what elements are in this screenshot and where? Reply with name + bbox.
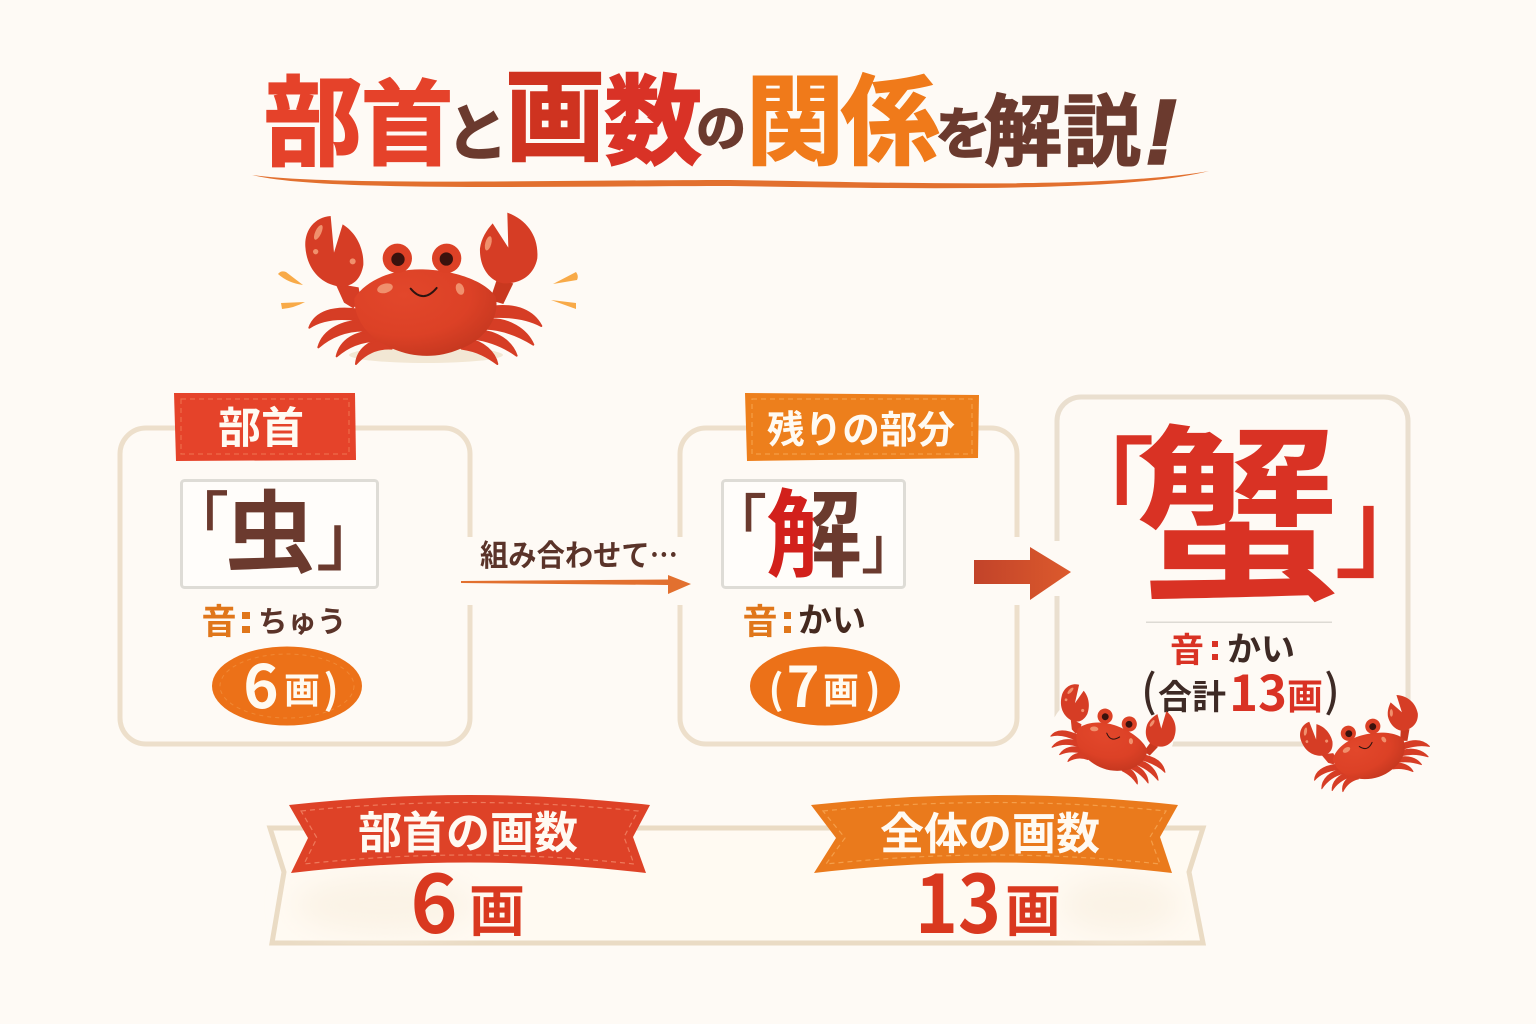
badge: 7 strokes: )	[865, 658, 881, 716]
badge: 7 strokes: 7	[786, 643, 820, 724]
value: 6 strokes: 画	[469, 867, 525, 948]
total strokes: )	[1324, 656, 1340, 720]
kanji box: mushi: 」	[316, 484, 386, 585]
halo: left small crab	[1050, 688, 1174, 782]
value: 6 strokes: 6	[410, 841, 458, 957]
badge: 6 strokes	[212, 639, 362, 726]
title: 数	[604, 43, 702, 185]
kanji box: kai: 「	[707, 475, 767, 562]
ribbon: total strokes: 全体の画数	[880, 798, 1100, 862]
badge: 7 strokes: 画	[823, 662, 859, 714]
badge: 6 strokes: 画	[284, 662, 320, 714]
large kanji: kani: 」	[1334, 439, 1446, 601]
ribbon: radical strokes: 部首の画数	[358, 797, 578, 861]
halo: right small crab	[1304, 692, 1428, 792]
title: 係	[841, 43, 939, 185]
large kanji: kani: 「	[1047, 403, 1155, 559]
reading: chuu: 音	[201, 594, 237, 645]
total strokes	[1141, 655, 1340, 726]
title: の	[696, 89, 746, 161]
panel: crab kanji result	[1047, 367, 1446, 792]
total strokes: (	[1141, 656, 1157, 720]
title: 画	[505, 36, 605, 181]
total strokes: 13	[1229, 655, 1287, 726]
value: 13 strokes	[915, 841, 1061, 957]
panel: radical	[120, 393, 477, 744]
badge: 6 strokes: 6	[243, 639, 279, 726]
tag: radical: 部首	[218, 394, 304, 456]
reading: kai total	[1170, 622, 1295, 672]
title underline	[252, 171, 1209, 188]
title: と	[446, 83, 508, 173]
title: !	[1146, 83, 1176, 183]
ribbon: total strokes	[811, 795, 1178, 873]
tag: remaining part	[745, 393, 979, 461]
arrow: combine	[461, 531, 691, 594]
value: 6 strokes	[410, 841, 525, 957]
kanji box: kai: 解	[766, 458, 862, 597]
reading: kai	[742, 593, 866, 645]
badge: 7 strokes: (	[768, 658, 784, 716]
title: 首	[361, 51, 453, 184]
icon: small crab right	[1296, 690, 1435, 799]
arrow: combine: 組み合わせて…	[480, 531, 678, 575]
title	[264, 36, 1176, 186]
total strokes: 画	[1287, 668, 1323, 720]
value: 13 strokes: 画	[1005, 867, 1061, 948]
ribbon: radical strokes	[289, 795, 650, 873]
kanji box: mushi: 「	[167, 471, 229, 561]
arrow: result	[974, 547, 1071, 600]
title: を	[935, 90, 991, 171]
title: 部	[264, 44, 362, 186]
panel: remaining part	[673, 393, 1024, 744]
title: 解	[984, 70, 1062, 182]
reading: kai: 音	[742, 594, 778, 645]
icon: small crab left	[1043, 679, 1183, 791]
tag: remaining part: 残りの部分	[767, 399, 955, 454]
large kanji: kani	[1047, 367, 1446, 639]
badge: 6 strokes: )	[323, 658, 339, 716]
reading: kai total: 音	[1170, 623, 1204, 672]
title: 関	[746, 43, 844, 185]
title: 説	[1063, 70, 1141, 182]
total strokes: 合計	[1158, 670, 1226, 719]
kanji box: kai	[707, 458, 919, 597]
tag: radical	[174, 393, 356, 461]
panel: summary	[270, 795, 1203, 957]
reading: chuu	[201, 594, 347, 645]
large kanji: kani: 蟹	[1135, 367, 1341, 639]
value: 13 strokes: 13	[915, 841, 1001, 957]
kanji box: mushi	[167, 461, 386, 591]
badge: 7 strokes	[750, 643, 900, 726]
kanji box: kai: 」	[861, 501, 919, 585]
kanji box: mushi: 虫	[225, 461, 315, 591]
reading: chuu: ちゅう	[258, 599, 347, 641]
icon: large crab	[278, 213, 578, 364]
reading: kai: かい	[798, 593, 866, 642]
reading: kai total: かい	[1227, 622, 1295, 671]
